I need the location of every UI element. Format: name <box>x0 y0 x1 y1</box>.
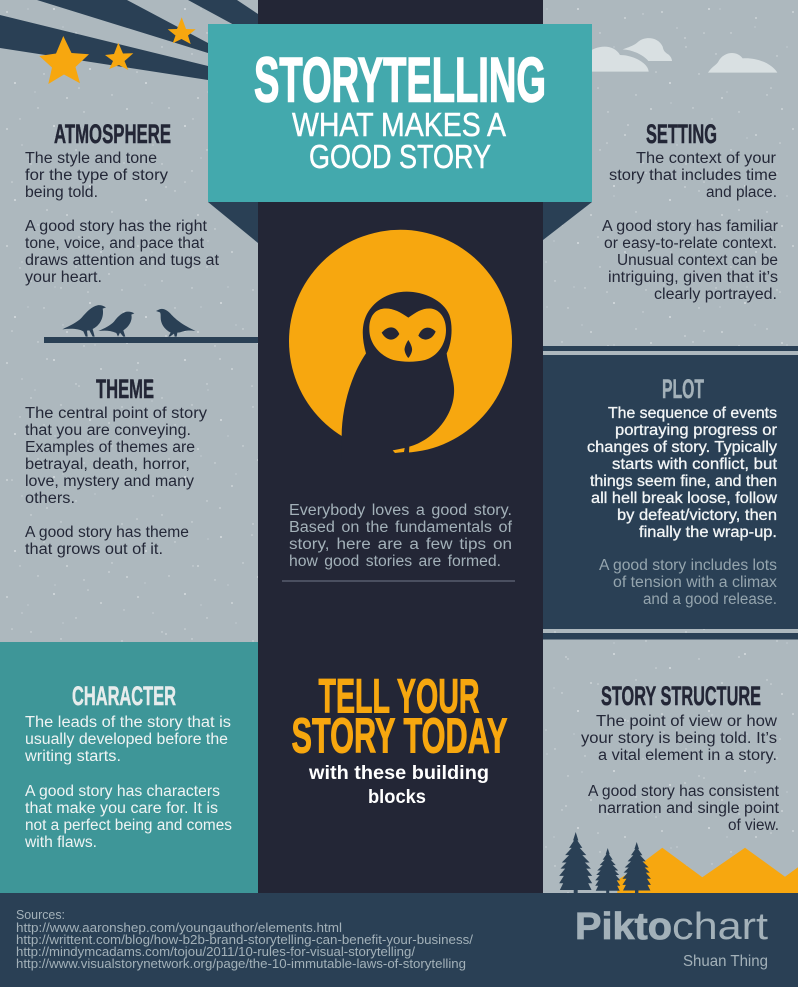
sources: http://writtent.com/blog/how-b2b-brand-storytelling-can-benefit-your-business/ <box>16 932 473 947</box>
call to action headline: STORY TODAY <box>292 710 508 764</box>
theme description: others. <box>25 490 75 507</box>
atmosphere description <box>25 150 168 201</box>
piktochart logo: Pikto <box>575 906 672 948</box>
intro text <box>289 502 513 570</box>
atmosphere heading: ATMOSPHERE <box>54 119 171 149</box>
panel: plot <box>543 346 798 640</box>
story structure description: a vital element in a story. <box>598 747 777 764</box>
setting tip: A good story has familiar <box>602 218 778 235</box>
setting description: The context of your <box>636 150 776 167</box>
owl face <box>369 309 446 362</box>
character description: writing starts. <box>24 748 121 765</box>
theme description: The central point of story <box>25 405 207 422</box>
sources <box>16 907 473 971</box>
character tip: that make you care for. It is <box>25 800 218 817</box>
theme description <box>25 405 207 507</box>
footer <box>0 893 798 987</box>
theme tip <box>25 524 189 558</box>
sources: http://www.visualstorynetwork.org/page/the-10-immutable-laws-of-storytelling <box>16 956 466 971</box>
plot description: all hell break loose, follow <box>591 490 778 507</box>
plot description: portraying progress or <box>615 422 777 439</box>
piktochart logo: chart <box>672 906 768 948</box>
title banner folds <box>208 202 592 243</box>
theme tip: that grows out of it. <box>25 541 163 558</box>
setting tip: intriguing, given that it’s <box>608 269 778 286</box>
piktochart logo <box>575 906 768 948</box>
setting description <box>609 150 777 201</box>
story structure tip: narration and single point <box>598 800 780 817</box>
call to action headline: TELL YOUR <box>318 670 480 724</box>
title: STORYTELLING <box>254 46 546 116</box>
plot tip: of tension with a climax <box>613 574 777 591</box>
panel: character <box>0 642 258 893</box>
icon: clouds <box>587 38 777 73</box>
icon: stars <box>39 17 196 84</box>
intro text: Everybody loves a good story. <box>289 502 512 519</box>
plot tip: and a good release. <box>643 591 777 608</box>
subtitle: WHAT MAKES A <box>292 106 506 143</box>
story structure description: your story is being told. It’s <box>581 730 777 747</box>
setting tip <box>602 218 778 303</box>
plot description: by defeat/victory, then <box>617 507 777 524</box>
character description <box>24 714 231 765</box>
subtitle <box>292 106 506 175</box>
intro text: Based on the fundamentals of <box>289 519 513 536</box>
sources: Sources: <box>16 907 65 922</box>
subtitle: GOOD STORY <box>309 138 491 175</box>
story structure tip <box>588 783 780 834</box>
call to action <box>292 670 508 808</box>
plot description: things seem fine, and then <box>590 473 777 490</box>
setting description: and place. <box>706 184 777 201</box>
plot tip: A good story includes lots <box>599 557 777 574</box>
icon: pine trees <box>559 832 651 893</box>
setting heading: SETTING <box>646 119 717 149</box>
call to action headline <box>292 670 508 764</box>
plot heading: PLOT <box>662 374 704 404</box>
owl beak <box>405 340 412 358</box>
atmosphere tip: A good story has the right <box>25 218 208 235</box>
atmosphere description: The style and tone <box>25 150 157 167</box>
icon: birds on a perch <box>44 305 258 343</box>
sky rays <box>0 0 258 80</box>
call to action subline: with these building <box>308 763 489 784</box>
theme tip: A good story has theme <box>25 524 189 541</box>
owl body <box>342 292 454 460</box>
intro text: story, here are a few tips on <box>289 536 512 553</box>
centre column <box>258 0 543 893</box>
setting description: story that includes time <box>609 167 777 184</box>
call to action subline <box>308 763 489 808</box>
plot tip <box>599 557 777 608</box>
atmosphere tip <box>25 218 220 286</box>
panel: theme <box>25 374 207 558</box>
icon: owl and moon <box>289 230 512 460</box>
atmosphere description: for the type of story <box>25 167 168 184</box>
title banner <box>208 24 592 202</box>
theme description: that you are conveying. <box>25 422 191 439</box>
character tip: A good story has characters <box>25 783 220 800</box>
icon: mountains <box>617 848 798 893</box>
call to action subline: blocks <box>368 787 426 808</box>
plot description <box>587 405 778 541</box>
plot description: starts with conflict, but <box>612 456 778 473</box>
owl toe <box>393 448 405 453</box>
author: Shuan Thing <box>683 953 768 970</box>
sources: http://mindymcadams.com/tojou/2011/10-rules-for-visual-storytelling/ <box>16 944 415 959</box>
atmosphere tip: your heart. <box>25 269 102 286</box>
panel: setting <box>602 119 778 303</box>
intro text: how good stories are formed. <box>289 553 501 570</box>
character tip: not a perfect being and comes <box>25 817 232 834</box>
panel: story structure <box>581 681 780 834</box>
character description: The leads of the story that is <box>25 714 231 731</box>
story structure description: The point of view or how <box>596 713 778 730</box>
plot description: changes of story. Typically <box>587 439 777 456</box>
character tip: with flaws. <box>24 834 97 851</box>
theme description: Examples of themes are <box>25 439 195 456</box>
character description: usually developed before the <box>25 731 228 748</box>
plot description: The sequence of events <box>608 405 777 422</box>
story structure description <box>581 713 778 764</box>
story structure tip: A good story has consistent <box>588 783 780 800</box>
setting tip: Unusual context can be <box>617 252 778 269</box>
theme description: love, mystery and many <box>25 473 194 490</box>
story structure tip: of view. <box>728 817 779 834</box>
character tip <box>24 783 232 851</box>
owl eyes <box>382 327 436 340</box>
character heading: CHARACTER <box>72 681 176 711</box>
setting tip: clearly portrayed. <box>654 286 777 303</box>
theme description: betrayal, death, horror, <box>25 456 190 473</box>
theme heading: THEME <box>96 374 154 404</box>
atmosphere tip: draws attention and tugs at <box>25 252 220 269</box>
panel: atmosphere <box>25 119 220 286</box>
atmosphere description: being told. <box>25 184 98 201</box>
atmosphere tip: tone, voice, and pace that <box>25 235 205 252</box>
plot description: finally the wrap-up. <box>639 524 777 541</box>
sources: http://www.aaronshep.com/youngauthor/elements.html <box>16 920 342 935</box>
setting tip: or easy-to-relate context. <box>604 235 777 252</box>
